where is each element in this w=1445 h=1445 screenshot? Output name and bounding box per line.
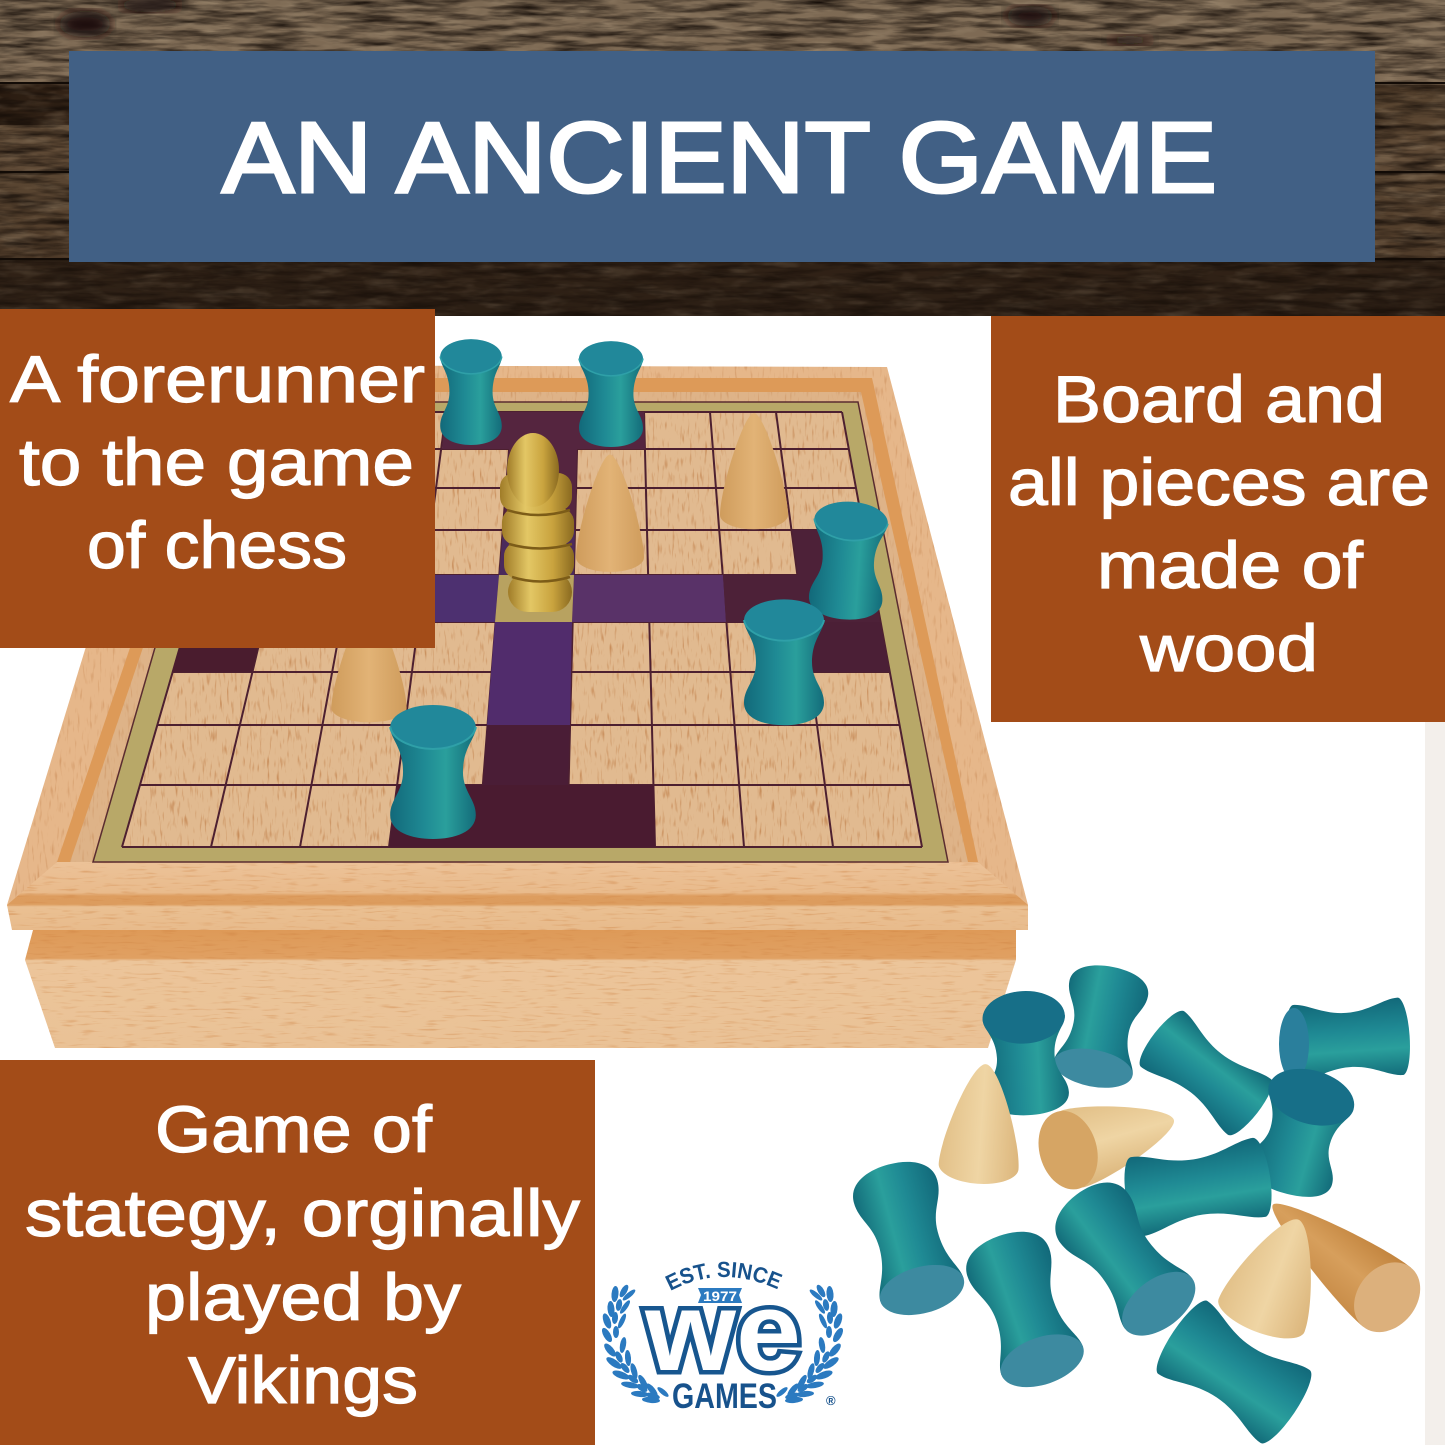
strategy text: Game of — [155, 1092, 433, 1166]
cone piece — [720, 413, 788, 529]
laurel right — [775, 1283, 845, 1404]
game board — [7, 365, 1028, 1048]
wood text: Board and — [1053, 362, 1385, 436]
logo: WE Games — [602, 1262, 843, 1416]
strategy text — [25, 1092, 580, 1417]
1977: 1977 — [703, 1288, 737, 1304]
wood plank header background — [0, 0, 1445, 316]
1977 banner — [698, 1288, 742, 1303]
strategy text: Vikings — [188, 1343, 418, 1417]
teal piece — [807, 499, 889, 622]
wood text: wood — [1139, 611, 1318, 685]
frame front rail — [7, 862, 1028, 930]
panel: made of wood — [991, 316, 1445, 722]
forerunner text: A forerunner — [10, 342, 425, 416]
gold border — [93, 402, 948, 862]
right edge strip — [1425, 722, 1445, 1445]
cone piece — [576, 454, 644, 572]
strategy text: stategy, orginally — [25, 1176, 580, 1250]
board pieces — [331, 339, 889, 839]
grid lines — [122, 412, 922, 847]
we wordmark: we — [644, 1269, 801, 1394]
cone piece — [331, 606, 407, 722]
teal piece — [440, 339, 502, 445]
title banner — [69, 51, 1375, 262]
board box base — [25, 930, 1016, 1048]
teal piece — [390, 705, 476, 839]
frame — [7, 365, 1028, 905]
forerunner text — [10, 342, 425, 582]
wood surface — [122, 412, 922, 847]
loose game pieces — [847, 959, 1434, 1445]
panel: forerunner — [0, 309, 435, 648]
cone with base — [1030, 1081, 1185, 1196]
title: AN ANCIENT GAME — [222, 102, 1217, 214]
forerunner text: to the game — [19, 425, 414, 499]
wood text — [1008, 362, 1430, 685]
forerunner text: of chess — [87, 508, 347, 582]
teal piece — [744, 599, 824, 725]
cone with base — [1249, 1175, 1434, 1345]
wood text: all pieces are — [1008, 445, 1430, 519]
strategy text: played by — [145, 1260, 461, 1334]
laurel left — [600, 1283, 670, 1404]
gold centre square — [495, 575, 574, 622]
est since: EST. SINCE — [665, 1262, 782, 1290]
wood text: made of — [1097, 528, 1364, 602]
teal piece — [579, 341, 643, 447]
games: GAMES — [672, 1377, 777, 1416]
registered mark: ® — [826, 1393, 836, 1408]
gold king piece — [500, 433, 574, 612]
purple cross squares — [172, 412, 890, 847]
panel: strategy — [0, 1060, 595, 1445]
